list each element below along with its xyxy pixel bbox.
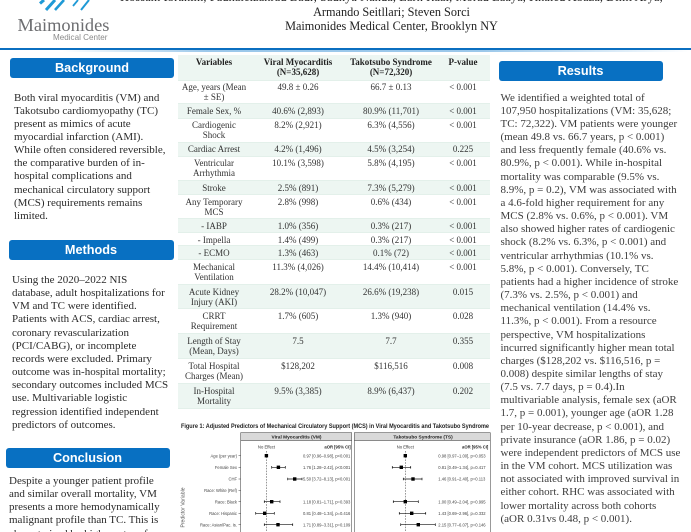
table: baseline characteristics and outcomes: Total Hospital xyxy=(188,361,240,371)
table: baseline characteristics and outcomes: Requirement xyxy=(191,321,237,331)
table: baseline characteristics and outcomes: 0.225 xyxy=(453,144,473,154)
text: methods body: Using the 2020–2022 NIS xyxy=(12,274,127,286)
text: results body: shock (8.2% vs. 6.3%, p < 0.001) and xyxy=(500,236,666,248)
text: results body: 107,950 hospitalizations (VM: 35,628; xyxy=(500,105,671,117)
table: baseline characteristics and outcomes: In-Hospital xyxy=(194,386,234,396)
table: baseline characteristics and outcomes: MCS xyxy=(204,207,224,217)
table: baseline characteristics and outcomes: 0.3% (217) xyxy=(371,235,411,245)
panel: viral myocarditis forest: 1.76 [1.28–2.42], p<0.001 xyxy=(303,465,351,470)
text: background body xyxy=(14,92,166,222)
table: baseline characteristics and outcomes: 66.7 ± 0.13 xyxy=(371,82,411,92)
table: baseline characteristics and outcomes: 0.3% (217) xyxy=(371,221,411,231)
icon: logo stripes xyxy=(39,0,90,11)
text: results body: in the VM cohort. MCS utilization was xyxy=(500,460,672,472)
table: baseline characteristics and outcomes: < 0.001 xyxy=(449,235,477,245)
table: baseline characteristics and outcomes: Female Sex, % xyxy=(187,106,241,116)
panel: takotsubo forest: No Effect xyxy=(397,444,415,449)
text: results body: patients had a higher incidence of stroke xyxy=(500,276,678,288)
table: baseline characteristics and outcomes: 0.1% (72) xyxy=(373,248,409,258)
table: baseline characteristics and outcomes: < 0.001 xyxy=(449,183,477,193)
text: results body: 80.9%, p < 0.001). While in-hospital xyxy=(500,157,662,169)
panel: viral myocarditis forest: aOR [95% CI] xyxy=(324,444,351,449)
table: baseline characteristics and outcomes: < 0.001 xyxy=(449,82,477,92)
table: baseline characteristics and outcomes: - ECMO xyxy=(198,248,230,258)
panel: takotsubo forest: 1.43 [0.69–2.96], p=0.332 xyxy=(438,511,486,516)
table: baseline characteristics and outcomes: Stroke xyxy=(202,183,226,193)
table: baseline characteristics and outcomes: < 0.001 xyxy=(449,120,477,130)
table: baseline characteristics and outcomes: 0.202 xyxy=(453,386,473,396)
table: baseline characteristics and outcomes: 6.3% (4,556) xyxy=(367,120,415,130)
table: baseline characteristics and outcomes: 8.9% (6,437) xyxy=(367,386,415,396)
panel: viral myocarditis forest: No Effect xyxy=(258,444,276,449)
table: baseline characteristics and outcomes: 1.3% (940) xyxy=(371,311,411,321)
heading: results: Results xyxy=(558,64,603,78)
panel: methods xyxy=(9,240,174,431)
table: baseline characteristics and outcomes: $116,516 xyxy=(374,361,408,371)
text: results body: (mean 49.8 vs. 66.7 years, p < 0.001) xyxy=(500,131,664,143)
panel: viral myocarditis forest xyxy=(238,433,352,532)
table: baseline characteristics and outcomes: 4.2% (1,496) xyxy=(274,144,322,154)
text: methods body: outcome was in-hospital mortality; xyxy=(12,366,166,378)
table: baseline characteristics and outcomes: 14.4% (10,414) xyxy=(363,262,419,272)
table header row: (N=35,628) xyxy=(277,67,319,77)
table: baseline characteristics and outcomes: 28.2% (10,047) xyxy=(270,287,326,297)
text: conclusion body: Despite a younger patient profile xyxy=(9,475,154,487)
table: baseline characteristics and outcomes: 1.7% (605) xyxy=(278,311,318,321)
text: results body: also showed higher rates of cardiogenic xyxy=(500,223,675,235)
text: methods body: (PCI/CABG), or incomplete xyxy=(12,340,136,352)
table: baseline characteristics and outcomes: Length of Stay xyxy=(187,336,241,346)
table: baseline characteristics and outcomes: 2.5% (891) xyxy=(278,183,318,193)
table header row: Takotsubo Syndrome xyxy=(350,57,432,67)
text: methods body: use. Multivariable logistic xyxy=(12,392,127,404)
table: baseline characteristics and outcomes: 0.028 xyxy=(453,311,473,321)
table: baseline characteristics and outcomes: Injury (AKI) xyxy=(191,297,237,307)
row labels: Female Sex xyxy=(215,465,238,470)
text: methods body xyxy=(12,274,168,431)
text: results body: lower mortality across both cohorts xyxy=(500,500,656,512)
panel: takotsubo forest: 0.98 [0.97–1.00], p=0.053 xyxy=(438,453,486,458)
text: methods body: database, adult hospitalizations for xyxy=(12,287,165,299)
text: conclusion body: malignant profile than TC. This is xyxy=(9,514,158,526)
table: baseline characteristics and outcomes: (Mean, Days) xyxy=(189,346,239,356)
row labels: Race: Hispanic xyxy=(209,511,237,516)
text: methods body: regression identified independent xyxy=(12,406,159,418)
authors: Armando Seitllari; Steven Sorci xyxy=(313,5,470,19)
table: baseline characteristics and outcomes: 0.008 xyxy=(453,361,473,371)
table: baseline characteristics and outcomes: 1.0% (356) xyxy=(278,221,318,231)
logo wordmark: Maimonides xyxy=(18,15,109,35)
panel: viral myocarditis forest: 0.81 [0.48–1.34], p=0.416 xyxy=(303,511,351,516)
table: baseline characteristics and outcomes: 49.8 ± 0.26 xyxy=(278,82,318,92)
table: baseline characteristics and outcomes: Ventricular xyxy=(194,158,234,168)
text: results body: 1.7, p = 0.001), younger age (aOR 1.28 xyxy=(500,407,674,419)
text: methods body: predictors of outcomes. xyxy=(12,419,116,431)
table: baseline characteristics and outcomes: < 0.001 xyxy=(449,158,477,168)
text: methods body: Patients with ACS, cardiac arrest, xyxy=(12,313,160,325)
table: baseline characteristics and outcomes: 40.6% (2,893) xyxy=(272,106,324,116)
row labels: Race: Black xyxy=(215,499,238,504)
text: results body xyxy=(500,92,680,525)
panel: viral myocarditis forest: 1.18 [0.81–1.71], p=0.393 xyxy=(303,499,351,504)
table: baseline characteristics and outcomes: Age, years (Mean xyxy=(182,82,246,92)
panel: viral myocarditis forest: 0.97 [0.96–0.98], p<0.001 xyxy=(303,453,351,458)
table: baseline characteristics and outcomes: Mechanical xyxy=(193,262,235,272)
row labels: Race: Asian/Pac. Is. xyxy=(200,522,237,527)
panel: viral myocarditis forest: 1.71 [0.89–3.31], p=0.109 xyxy=(303,522,351,527)
text: results body: not associated with improved survival in xyxy=(500,473,679,485)
text: background body: present as mimics of acute xyxy=(14,118,131,130)
heading: conclusion xyxy=(6,448,170,468)
panel: background xyxy=(10,58,174,222)
heading: background xyxy=(10,58,174,78)
text: conclusion body: presents a more hemodynamically xyxy=(9,501,160,513)
table: baseline characteristics and outcomes: 1.4% (499) xyxy=(278,235,318,245)
text: results body: mortality was comparable (9.5% vs. xyxy=(500,171,659,183)
authors: Maimonides Medical Center, Brooklyn NY xyxy=(285,19,498,33)
text: results body: perspective, VM hospitalizations xyxy=(500,328,645,340)
text: results body: either cohort. RHC was associated with xyxy=(500,486,675,498)
text: methods body: coronary revascularization xyxy=(12,327,129,339)
table: baseline characteristics and outcomes: 2.8% (998) xyxy=(278,197,318,207)
text: results body: (aOR 0.31vs 0.48, p < 0.001). xyxy=(500,513,632,525)
text: results body: ventricular arrhythmias (10.1% vs. xyxy=(500,250,654,262)
text: results body: mechanical ventilation (14.4% vs. xyxy=(500,302,650,314)
table: baseline characteristics and outcomes: 0.355 xyxy=(453,336,473,346)
chart: forest plot of MCS predictors xyxy=(180,423,491,532)
table: baseline characteristics and outcomes: < 0.001 xyxy=(449,221,477,231)
table: baseline characteristics and outcomes: Charges (Mean) xyxy=(185,371,243,381)
panel: takotsubo forest: Takotsubo Syndrome (TS) xyxy=(393,435,453,441)
heading: results xyxy=(498,61,662,81)
table: baseline characteristics and outcomes: Cardiogenic xyxy=(192,120,236,130)
table: baseline characteristics and outcomes: $128,202 xyxy=(281,361,315,371)
panel: conclusion xyxy=(6,448,170,532)
table header row xyxy=(178,55,490,80)
logo subtitle: Medical Center xyxy=(53,33,107,42)
header: logo xyxy=(18,0,109,42)
row labels: Age (per year) xyxy=(211,453,238,458)
table: baseline characteristics and outcomes: CRRT xyxy=(203,311,225,321)
table: baseline characteristics and outcomes: 0.6% (434) xyxy=(371,197,411,207)
panel: takotsubo forest: 1.46 [0.91–2.40], p=0.113 xyxy=(438,477,486,482)
panel: results xyxy=(499,61,680,525)
table: baseline characteristics and outcomes: 11.3% (4,026) xyxy=(272,262,324,272)
panel: takotsubo forest: 0.81 [0.49–1.34], p=0.417 xyxy=(438,465,486,470)
heading: conclusion: Conclusion xyxy=(53,451,122,465)
text: results body: 8.9%, p = 0.2), VM was associated with xyxy=(500,184,677,196)
text: results body: MCS (2.8% vs. 0.6%, p < 0.001). VM xyxy=(500,210,668,222)
table: baseline characteristics and outcomes: < 0.001 xyxy=(449,197,477,207)
table: baseline characteristics and outcomes: Shock xyxy=(203,130,225,140)
panel: takotsubo forest: aOR [95% CI] xyxy=(462,444,489,449)
panel: takotsubo forest xyxy=(354,433,490,532)
table: baseline characteristics and outcomes: ± SE) xyxy=(204,92,224,102)
row labels: CHF xyxy=(228,477,237,482)
row labels xyxy=(200,453,238,527)
heading: methods: Methods xyxy=(65,243,117,257)
text: results body: a 4.6-fold higher requirement for any xyxy=(500,197,664,209)
table: baseline characteristics and outcomes: 7.7 xyxy=(385,336,397,346)
text: methods body: records were excluded. Primary xyxy=(12,353,152,365)
table: baseline characteristics and outcomes: Any Temporary xyxy=(186,197,242,207)
table: baseline characteristics and outcomes: 26.6% (19,238) xyxy=(363,287,419,297)
table: baseline characteristics and outcomes: 0.015 xyxy=(453,287,473,297)
y axis label: Predictor Variable xyxy=(180,487,186,528)
panel: viral myocarditis forest: 5.50 [3.72–8.13], p<0.001 xyxy=(303,477,351,482)
text: results body: TC: 72,322). VM patients were younger xyxy=(500,118,677,130)
table: baseline characteristics and outcomes: Acute Kidney xyxy=(189,287,239,297)
text: background body: hospital complications and xyxy=(14,170,132,182)
text: results body: 5.8%, p < 0.001). Conversely, TC xyxy=(500,263,649,275)
text: results body: 11.3%, p < 0.001). From a resource xyxy=(500,315,657,327)
table: baseline characteristics and outcomes: < 0.001 xyxy=(449,248,477,258)
panel: takotsubo forest: 1.00 [0.49–2.04], p=0.995 xyxy=(438,499,486,504)
text: results body: 0.008) despite similar lengths of stay xyxy=(500,368,663,380)
text: background body: (MCS) requirements remains xyxy=(14,197,142,209)
text: conclusion body xyxy=(9,475,160,532)
text: results body: private insurance (aOR 1.86, p = 0.02) xyxy=(500,434,670,446)
table header row: Viral Myocarditis xyxy=(264,57,332,67)
text: methods body: VM and TC were identified. xyxy=(12,300,137,312)
text: results body: were independent predictors of MCS use xyxy=(500,447,680,459)
text: results body: incurred significantly higher mean total xyxy=(500,342,675,354)
text: background body: While often considered reversible, xyxy=(14,144,166,156)
table header row: (N=72,320) xyxy=(370,67,412,77)
heading: methods xyxy=(8,240,174,260)
table: baseline characteristics and outcomes xyxy=(178,55,490,409)
table: baseline characteristics and outcomes: - Impella xyxy=(198,235,230,245)
table: baseline characteristics and outcomes: 8.2% (2,921) xyxy=(274,120,322,130)
text: results body: per 10-year decrease, p < 0.001), and xyxy=(500,421,664,433)
text: methods body: secondary outcomes included MCS xyxy=(12,379,168,391)
text: results body: and less frequently female (40.6% vs. xyxy=(500,144,666,156)
table: baseline characteristics and outcomes: Arrhythmia xyxy=(193,168,235,178)
text: conclusion body: and similar overall mortality, VM xyxy=(9,488,157,500)
table: baseline characteristics and outcomes: 5.8% (4,195) xyxy=(367,158,415,168)
text: results body: multivariable analysis, female sex (aOR xyxy=(500,394,677,406)
table: baseline characteristics and outcomes: Cardiac Arrest xyxy=(188,144,240,154)
table header row: Variables xyxy=(196,57,232,67)
table: baseline characteristics and outcomes: < 0.001 xyxy=(449,262,477,272)
table: baseline characteristics and outcomes: 9.5% (3,385) xyxy=(274,386,322,396)
heading: background: Background xyxy=(55,61,129,75)
row labels: Race: White (Ref) xyxy=(204,488,238,493)
table: baseline characteristics and outcomes: - IABP xyxy=(201,221,227,231)
text: background body: limited. xyxy=(14,210,48,222)
table: baseline characteristics and outcomes: 7.5 xyxy=(292,336,304,346)
table: baseline characteristics and outcomes: < 0.001 xyxy=(449,106,477,116)
panel: viral myocarditis forest: Viral Myocarditis (VM) xyxy=(271,435,322,441)
table header row: P-value xyxy=(448,57,478,67)
table: baseline characteristics and outcomes: 80.9% (11,701) xyxy=(363,106,419,116)
table: baseline characteristics and outcomes: 4.5% (3,254) xyxy=(367,144,415,154)
text: background body: mechanical circulatory support xyxy=(14,184,150,196)
table: baseline characteristics and outcomes: Mortality xyxy=(197,396,231,406)
text: background body: the comparative burden of in- xyxy=(14,157,145,169)
text: results body: (7.5 vs. 7.7 days, p = 0.4).In xyxy=(500,381,625,393)
text: results body: We identified a weighted total of xyxy=(500,92,645,104)
text: results body: (7.3% vs. 2.5%, p < 0.001) and xyxy=(500,289,638,301)
text: background body: Takotsubo cardiomyopathy (TC) xyxy=(14,105,158,117)
table: baseline characteristics and outcomes: 7.3% (5,279) xyxy=(367,183,415,193)
authors xyxy=(120,0,663,33)
text: background body: myocardial infarction (AMI). xyxy=(14,131,143,143)
table: baseline characteristics and outcomes: 10.1% (3,598) xyxy=(272,158,324,168)
text: results body: charges ($128,202 vs. $116,516, p = xyxy=(500,355,660,367)
panel: takotsubo forest: 2.15 [0.77–6.07], p=0.146 xyxy=(438,522,486,527)
table: baseline characteristics and outcomes: Ventilation xyxy=(194,272,234,282)
text: background body: Both viral myocarditis (VM) and xyxy=(14,92,159,104)
table: baseline characteristics and outcomes: 1.3% (463) xyxy=(278,248,318,258)
